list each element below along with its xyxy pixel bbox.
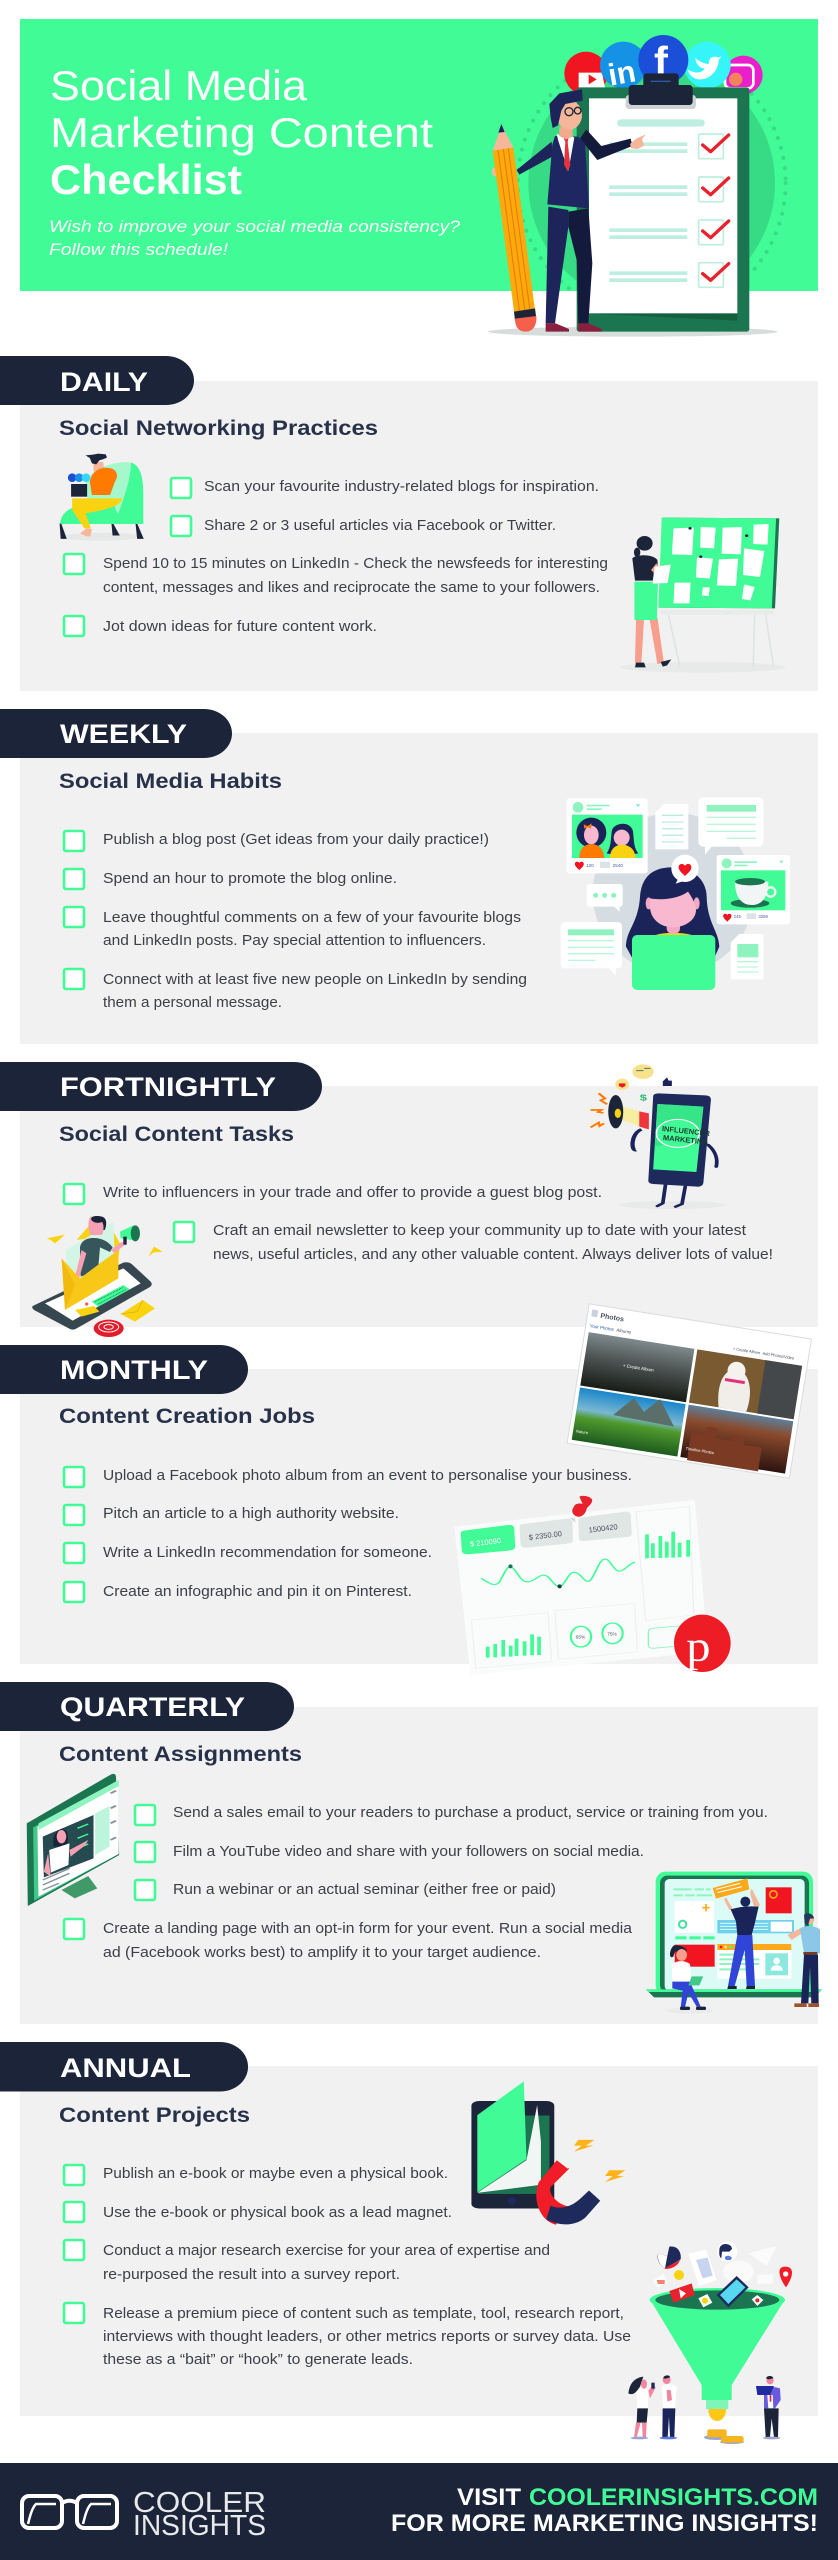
stat card xyxy=(461,1525,515,1554)
icon: pinterest xyxy=(674,1615,731,1672)
icon: red at sign xyxy=(94,1320,124,1337)
checklist item xyxy=(64,1184,602,1204)
checklist item: Release a premium piece of content such as template, tool, research report, xyxy=(103,2306,624,2322)
subtitle xyxy=(49,217,461,259)
panel: monthly xyxy=(20,1369,818,1664)
icon: instagram xyxy=(724,56,763,94)
panel: daily xyxy=(20,381,818,691)
call to action: FOR MORE MARKETING INSIGHTS! xyxy=(391,2510,818,2537)
checklist item: Use the e-book or physical book as a lead magnet. xyxy=(103,2205,452,2221)
panel: quarterly xyxy=(20,1707,818,2024)
line chart xyxy=(481,1559,635,1588)
tag: weekly xyxy=(0,709,232,758)
title: Marketing Content xyxy=(50,109,433,156)
checklist item: Spend an hour to promote the blog online. xyxy=(103,871,397,887)
section: quarterly xyxy=(0,1682,818,2024)
man with clasped hands xyxy=(660,2375,677,2439)
man with tablet xyxy=(756,2376,781,2439)
checklist item: Write a LinkedIn recommendation for someone. xyxy=(103,1545,432,1561)
checklist item: Leave thoughtful comments on a few of your favourite blogs xyxy=(103,910,521,926)
section: weekly xyxy=(0,709,818,1044)
standing man xyxy=(724,1888,760,1989)
call to action xyxy=(391,2484,818,2537)
speech bubble xyxy=(698,797,763,855)
checklist item xyxy=(64,616,377,636)
stat card: $ 210090 xyxy=(470,1536,502,1549)
call to action: COOLERINSIGHTS.COM xyxy=(529,2484,818,2511)
logo: glasses xyxy=(22,2496,117,2528)
checklist item xyxy=(64,969,527,1011)
illustration: influencer marketing phone with megaphone xyxy=(591,1064,726,1209)
icon: linkedin xyxy=(600,42,647,93)
checklist item xyxy=(64,2165,448,2185)
checklist item: Run a webinar or an actual seminar (either free or paid) xyxy=(173,1882,556,1898)
title: Social Media xyxy=(50,62,308,109)
illustration: influencer marketing phone with megaphone: INFLUENCER xyxy=(662,1124,711,1138)
checklist item xyxy=(64,554,608,596)
clipboard xyxy=(577,73,749,332)
social post: coffee xyxy=(717,855,790,924)
icon: twitter xyxy=(684,42,731,88)
icon: facebook: f xyxy=(654,38,668,85)
checklist item: Create an infographic and pin it on Pinterest. xyxy=(103,1584,412,1600)
footer xyxy=(0,2463,838,2560)
photo: misty hills xyxy=(580,1332,694,1402)
checklist item: Publish a blog post (Get ideas from your daily practice!) xyxy=(103,832,489,848)
comment bubble xyxy=(561,922,622,976)
checklist item xyxy=(171,478,599,498)
photo: mountain lake: Nature xyxy=(576,1428,589,1435)
illustration: woman at notice board xyxy=(620,518,786,673)
stat card xyxy=(578,1512,632,1541)
checklist item xyxy=(135,1880,556,1900)
checklist item xyxy=(64,1582,412,1602)
coins xyxy=(704,2429,744,2444)
photo: mountain lake xyxy=(572,1386,686,1457)
title xyxy=(50,62,433,203)
tag: fortnightly: FORTNIGHTLY xyxy=(60,1072,276,1102)
photo: desert town xyxy=(680,1405,793,1476)
checklist item: Spend 10 to 15 minutes on LinkedIn - Check the newsfeeds for interesting xyxy=(103,556,608,572)
logo: wordmark: COOLER xyxy=(133,2487,266,2519)
funnel xyxy=(650,2288,785,2421)
illustration: analytics dashboard pinned: 65% xyxy=(576,1635,586,1641)
call to action: VISIT xyxy=(457,2484,521,2511)
floating content icons xyxy=(653,2241,792,2287)
stat card: $ 2350.00 xyxy=(528,1529,562,1542)
checklist item xyxy=(64,907,521,949)
illustration: person on chair with laptop xyxy=(60,454,143,541)
social post: coffee: 245 xyxy=(734,914,741,919)
checklist item xyxy=(64,1505,399,1525)
hero banner xyxy=(20,19,818,291)
heart bubble xyxy=(671,855,699,884)
checklist item xyxy=(64,2303,631,2368)
panel: fortnightly xyxy=(20,1086,818,1327)
checklist item xyxy=(174,1222,773,1263)
checklist item: Pitch an article to a high authority website. xyxy=(103,1506,399,1522)
tag: quarterly xyxy=(0,1682,294,1731)
checklist item: Jot down ideas for future content work. xyxy=(103,619,377,635)
illustration: facebook photo album: + Create Album xyxy=(733,1346,761,1355)
checklist item: Conduct a major research exercise for your area of expertise and xyxy=(103,2243,550,2259)
heading: content assignments: Content Assignments xyxy=(59,1742,302,1766)
heading: content projects: Content Projects xyxy=(59,2103,250,2127)
checklist item: ad (Facebook works best) to amplify it to your target audience. xyxy=(103,1945,541,1961)
heading: social content tasks: Social Content Tasks xyxy=(59,1122,294,1146)
icon: pinterest: p xyxy=(686,1622,711,1670)
typing bubble xyxy=(587,884,623,912)
checklist item xyxy=(64,1919,633,1961)
logo: wordmark: INSIGHTS xyxy=(133,2510,266,2542)
section: daily xyxy=(0,356,818,691)
illustration: facebook photo album: Add Photos/Video xyxy=(762,1351,795,1361)
checklist item xyxy=(64,1543,432,1563)
illustration: influencer marketing phone with megaphone: MARKETING xyxy=(663,1133,709,1147)
checklist item xyxy=(64,2240,550,2283)
icon: facebook xyxy=(638,35,688,85)
stat card xyxy=(520,1519,573,1548)
bar chart: sidebar xyxy=(645,1532,690,1558)
photo: cat xyxy=(689,1349,802,1419)
woman xyxy=(626,867,719,990)
illustration: ebook tablet and magnet xyxy=(471,2081,625,2225)
illustration: man emerging from email on phone xyxy=(32,1216,163,1330)
gauges xyxy=(571,1623,623,1647)
checklist item xyxy=(64,831,489,851)
illustration: woman with social posts xyxy=(561,797,790,990)
tag: fortnightly xyxy=(0,1062,322,1111)
photo: desert town: Timeline Photos xyxy=(685,1446,714,1455)
checklist item: re-purposed the result into a survey report. xyxy=(103,2267,400,2283)
checklist item xyxy=(64,869,397,889)
section: monthly xyxy=(0,1345,818,1664)
illustration: facebook photo album: Albums xyxy=(616,1327,632,1335)
checklist item: Film a YouTube video and share with your followers on social media. xyxy=(173,1844,644,1860)
illustration: team building landing page on laptop xyxy=(646,1872,822,2014)
checklist item: these as a “bait” or “hook” to generate leads. xyxy=(103,2352,413,2368)
illustration: facebook photo album: Photos xyxy=(600,1313,624,1323)
tag: quarterly: QUARTERLY xyxy=(60,1692,245,1722)
magnet xyxy=(536,2152,605,2225)
heading: social media habits: Social Media Habits xyxy=(59,769,282,793)
checklist item: Craft an email newsletter to keep your community up to date with your latest xyxy=(213,1223,746,1239)
illustration: facebook photo album xyxy=(567,1304,811,1478)
seated woman xyxy=(670,1945,706,2010)
checklist item: Create a landing page with an opt-in form for your event. Run a social media xyxy=(103,1921,633,1937)
checklist item: content, messages and likes and reciprocate the same to your followers. xyxy=(103,580,600,596)
tag: monthly xyxy=(0,1345,248,1394)
illustration: facebook photo album: Your Photos xyxy=(589,1323,615,1332)
man xyxy=(492,89,646,332)
checklist item xyxy=(64,2202,452,2222)
social post: two friends xyxy=(567,798,648,873)
checklist item: them a personal message. xyxy=(103,995,282,1011)
checklist item: Upload a Facebook photo album from an event to personalise your business. xyxy=(103,1468,632,1484)
section: fortnightly xyxy=(0,1062,818,1327)
icon: red push pin xyxy=(569,1496,592,1523)
photo: misty hills: + Create Album xyxy=(623,1363,654,1373)
document xyxy=(731,934,763,979)
woman with phone xyxy=(628,2377,656,2439)
heading: content creation jobs: Content Creation Jobs xyxy=(59,1404,315,1428)
subtitle: Follow this schedule! xyxy=(49,240,228,259)
title: Checklist xyxy=(50,156,242,203)
tag: monthly: MONTHLY xyxy=(60,1355,208,1385)
illustration: analytics dashboard pinned xyxy=(454,1496,731,1675)
tag: daily xyxy=(0,356,194,405)
section: annual xyxy=(0,2042,818,2416)
panel: annual xyxy=(20,2066,818,2416)
panel: weekly xyxy=(20,733,818,1044)
illustration: analytics dashboard pinned: 75% xyxy=(607,1631,618,1637)
checklist item xyxy=(171,516,556,536)
social post: coffee: 3289 xyxy=(758,914,769,919)
checklist item: and LinkedIn posts. Pay special attention to influencers. xyxy=(103,933,486,949)
funnel contents xyxy=(669,2276,763,2307)
logo: wordmark xyxy=(133,2487,266,2542)
pencil xyxy=(493,124,536,332)
checklist item: Connect with at least five new people on LinkedIn by sending xyxy=(103,972,527,988)
tag: daily: DAILY xyxy=(60,367,148,397)
tag: annual: ANNUAL xyxy=(60,2053,191,2083)
checklist item: Send a sales email to your readers to purchase a product, service or training from you. xyxy=(173,1805,768,1821)
checklist item: Scan your favourite industry-related blogs for inspiration. xyxy=(204,479,599,495)
illustration: influencer marketing phone with megaphone: $ xyxy=(640,1094,647,1103)
heading: social networking practices: Social Networking Practices xyxy=(59,416,378,440)
icon: linkedin: in xyxy=(606,54,638,93)
tag: weekly: WEEKLY xyxy=(60,719,187,749)
tag: annual xyxy=(0,2042,248,2092)
checklist item: Publish an e-book or maybe even a physical book. xyxy=(103,2166,448,2182)
social post: two friends: 2540 xyxy=(613,863,623,868)
illustration: marketing funnel with people xyxy=(628,2241,792,2444)
icon: youtube xyxy=(564,52,608,95)
checklist item: Share 2 or 3 useful articles via Facebook or Twitter. xyxy=(204,518,556,534)
social post: two friends: 120 xyxy=(586,863,594,868)
illustration: webinar monitor xyxy=(27,1774,119,1906)
bar chart: bottom xyxy=(486,1634,541,1658)
illustration: businessman with pencil and checklist clipboard xyxy=(488,35,786,337)
stat card: 1500420 xyxy=(588,1522,618,1535)
document xyxy=(655,804,688,849)
checklist item: Write to influencers in your trade and offer to provide a guest blog post. xyxy=(103,1185,602,1201)
checklist item: news, useful articles, and any other valuable content. Always deliver lots of value! xyxy=(213,1247,773,1263)
checklist item: interviews with thought leaders, or other metrics reports or survey data. Use xyxy=(103,2329,631,2345)
subtitle: Wish to improve your social media consistency? xyxy=(49,217,461,236)
standing man right xyxy=(787,1913,820,2007)
